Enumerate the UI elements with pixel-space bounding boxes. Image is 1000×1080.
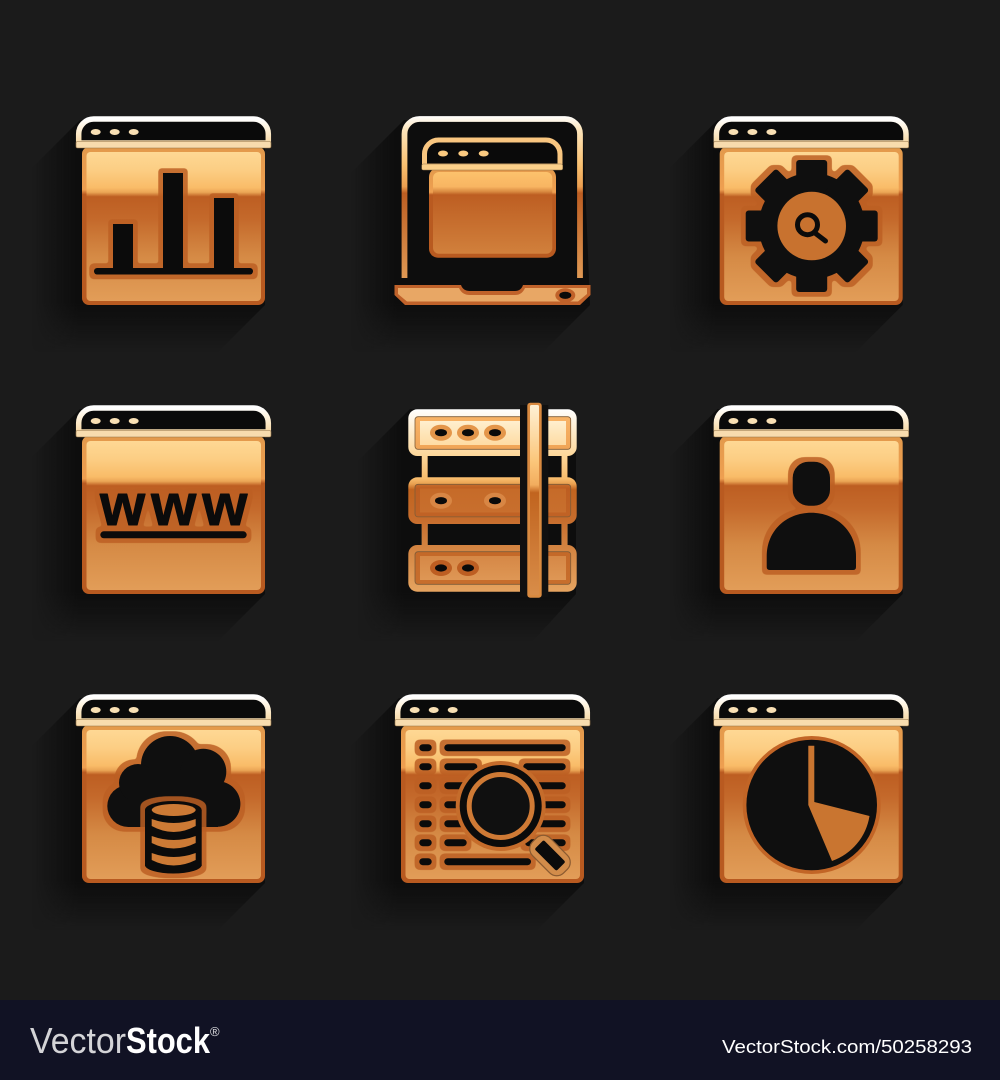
laptop base — [394, 285, 590, 305]
icon: browser with person profile — [714, 408, 909, 594]
footer logo: VectorStock: ® — [210, 1024, 220, 1039]
laptop screen — [404, 119, 580, 278]
magnifier — [798, 215, 826, 241]
icon: laptop with browser window — [394, 119, 590, 305]
gear hub — [777, 192, 846, 260]
icon: browser with search over text list — [395, 697, 590, 883]
person — [767, 462, 856, 570]
icon: browser with www address — [76, 408, 271, 594]
icon: browser with pie chart — [714, 697, 909, 883]
server units — [408, 409, 577, 592]
text list lines — [419, 744, 566, 865]
gear — [746, 160, 878, 292]
connectors — [422, 454, 568, 547]
vertical pole — [527, 403, 542, 598]
database cylinder — [145, 801, 202, 874]
bar chart — [94, 173, 253, 274]
icon: browser with gear and magnifier — [714, 119, 909, 305]
window panel — [422, 140, 563, 258]
footer image id: VectorStock.com/50258293 — [722, 1036, 972, 1057]
gap behind pole — [520, 405, 548, 597]
footer logo: VectorStock: Vector — [30, 1020, 126, 1061]
server indicator lights — [430, 425, 506, 576]
www address text: www — [99, 473, 253, 538]
cloud — [107, 736, 240, 827]
magnifying glass — [456, 761, 574, 880]
footer logo: VectorStock: Stock — [126, 1020, 211, 1061]
footer logo: VectorStock — [30, 1020, 220, 1061]
footer band — [0, 1000, 1000, 1080]
icon: server rack — [408, 403, 577, 598]
icon: browser with cloud database — [76, 697, 271, 883]
pie chart — [743, 736, 881, 874]
long shadows — [30, 120, 903, 933]
icon: browser with bar chart — [76, 119, 271, 305]
